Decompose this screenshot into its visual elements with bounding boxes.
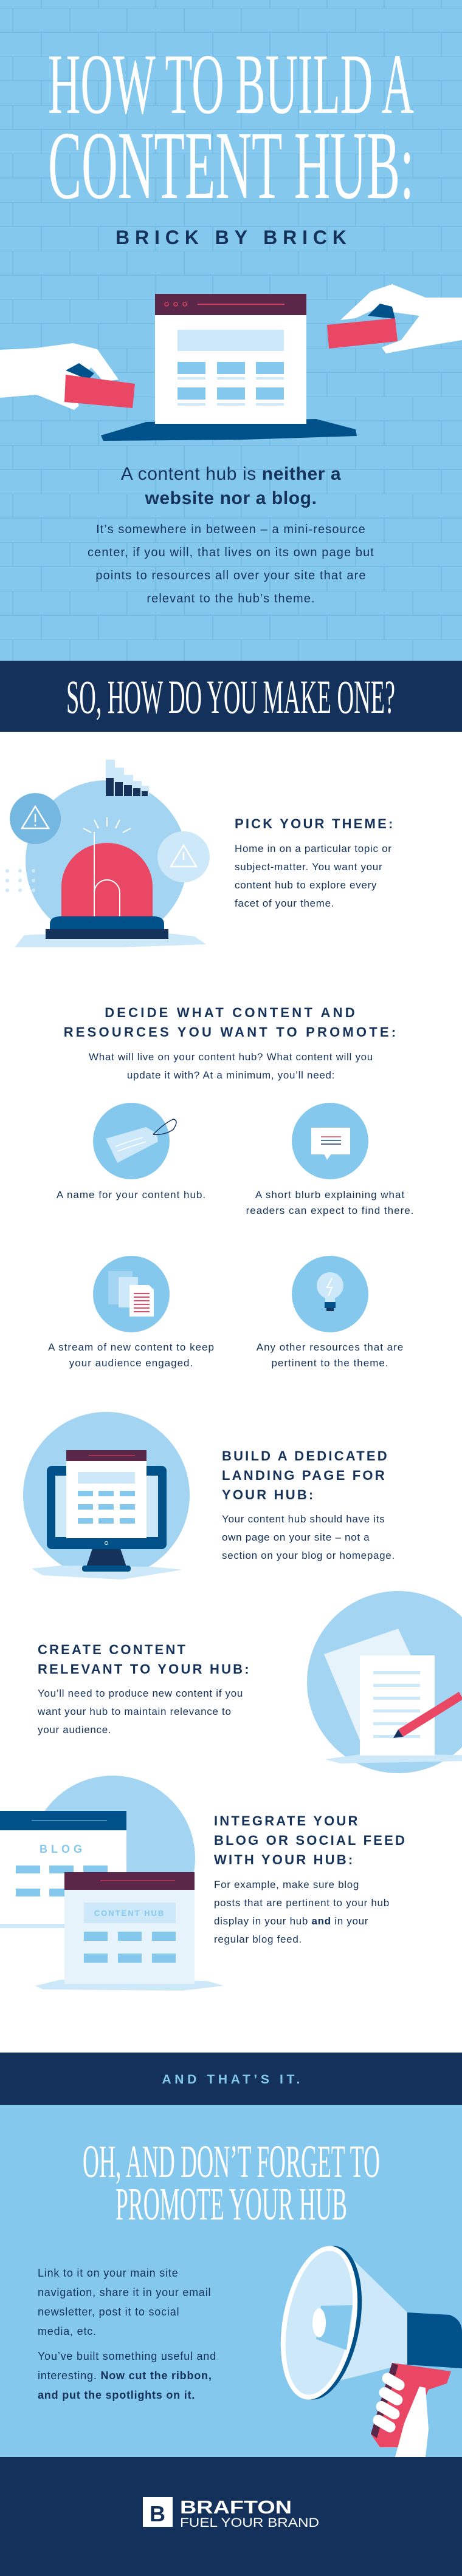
- promo text: interesting. Now cut the ribbon,: [38, 2370, 212, 2382]
- step text: landing page: section on your blog or homepage.: [222, 1550, 395, 1561]
- step text: landing page: Your content hub should have its: [222, 1513, 385, 1525]
- footer: [0, 2457, 462, 2576]
- illustration: blog and content hub windows: CONTENT HUB: [94, 1909, 165, 1918]
- caption: other resources: [257, 1341, 404, 1369]
- caption: stream: A stream of new content to keep: [48, 1341, 215, 1353]
- promo section background: [0, 2105, 462, 2457]
- intro paragraph: center, if you will, that lives on its own page but: [88, 546, 374, 559]
- caption: stream: [48, 1341, 215, 1369]
- title: [48, 36, 414, 219]
- icon: light bulb: [292, 1256, 368, 1332]
- header background: [0, 0, 462, 661]
- promo text: media, etc.: [38, 2325, 97, 2337]
- step text: pick your theme: Home in on a particular topic or: [235, 843, 392, 854]
- promo text: [38, 2267, 216, 2401]
- illustration: blog and content hub windows: [0, 1776, 224, 1991]
- intro heading: [120, 464, 341, 508]
- step heading: landing page: [222, 1448, 389, 1502]
- footer: FUEL YOUR BRAND: [180, 2516, 319, 2530]
- step text: create content: want your hub to maintain relevance to: [38, 1706, 232, 1717]
- band: and that's it: [0, 2053, 462, 2105]
- step text: decide content: update it with? At a minimum, you’ll need:: [127, 1069, 335, 1081]
- illustration: browser with hands: [0, 284, 462, 441]
- caption: name: A name for your content hub.: [57, 1189, 206, 1201]
- footer: BRAFTON: [180, 2496, 292, 2518]
- step heading: decide content: [64, 1005, 398, 1040]
- illustration: monitor: [23, 1412, 190, 1579]
- left hand: [0, 343, 119, 410]
- intro paragraph: [88, 523, 374, 605]
- step heading: landing page: LANDING PAGE FOR: [222, 1468, 387, 1483]
- promo text: newsletter, post it to social: [38, 2306, 179, 2318]
- step text: integrate: posts that are pertinent to your hub: [214, 1897, 390, 1909]
- step text: create content: your audience.: [38, 1724, 111, 1736]
- icon: documents: [93, 1256, 170, 1332]
- promo title: [83, 2136, 380, 2230]
- caption: blurb: A short blurb explaining what: [255, 1189, 405, 1201]
- step heading: decide content: DECIDE WHAT CONTENT AND: [105, 1005, 357, 1020]
- promo text: You’ve built something useful and: [38, 2350, 216, 2362]
- step heading: create content: CREATE CONTENT: [38, 1642, 187, 1657]
- right hand: [340, 284, 462, 353]
- step heading: create content: RELEVANT TO YOUR HUB:: [38, 1661, 251, 1677]
- caption: other resources: Any other resources that are: [257, 1341, 404, 1353]
- step text: pick your theme: facet of your theme.: [235, 898, 334, 909]
- promo text: and put the spotlights on it.: [38, 2389, 195, 2401]
- section band: how do you make one: [0, 661, 462, 732]
- subtitle: BRICK BY BRICK: [116, 227, 346, 248]
- step heading: integrate: WITH YOUR HUB:: [214, 1852, 354, 1867]
- step heading: pick your theme: PICK YOUR THEME:: [235, 816, 395, 831]
- footer: B: [150, 2501, 165, 2526]
- step heading: integrate: [214, 1813, 407, 1867]
- icon: speech bubble: [292, 1103, 368, 1179]
- step text: pick your theme: content hub to explore every: [235, 879, 377, 891]
- caption: blurb: readers can expect to find there.: [246, 1205, 414, 1216]
- step text: create content: [38, 1688, 243, 1736]
- step text: integrate: regular blog feed.: [214, 1934, 302, 1945]
- step text: pick your theme: [235, 843, 392, 909]
- caption: blurb: [246, 1189, 414, 1216]
- illustration: paper and pencil: [307, 1591, 462, 1773]
- icon: name tag: [93, 1103, 176, 1179]
- step text: create content: You’ll need to produce new content if you: [38, 1688, 243, 1699]
- step heading: create content: [38, 1642, 251, 1677]
- promo text: Link to it on your main site: [38, 2267, 179, 2279]
- caption: other resources: pertinent to the theme.: [271, 1357, 389, 1369]
- step heading: integrate: BLOG OR SOCIAL FEED: [214, 1833, 407, 1848]
- step text: decide content: What will live on your content hub? What content will you: [89, 1051, 373, 1063]
- step text: decide content: [89, 1051, 373, 1081]
- step text: integrate: display in your hub and in your: [214, 1915, 368, 1927]
- step heading: decide content: RESOURCES YOU WANT TO PROMOTE:: [64, 1024, 398, 1040]
- intro heading: A content hub is neither a: [121, 464, 341, 484]
- step text: pick your theme: subject-matter. You want your: [235, 861, 382, 873]
- step heading: integrate: INTEGRATE YOUR: [214, 1813, 360, 1828]
- illustration: siren: [5, 760, 210, 947]
- illustration: blog and content hub windows: BLOG: [40, 1843, 86, 1855]
- intro paragraph: points to resources all over your site that are: [95, 569, 367, 582]
- step heading: landing page: BUILD A DEDICATED: [222, 1448, 389, 1463]
- step text: landing page: [222, 1513, 395, 1561]
- step text: integrate: For example, make sure blog: [214, 1879, 359, 1890]
- step text: landing page: own page on your site – not a: [222, 1532, 370, 1543]
- intro paragraph: It’s somewhere in between – a mini-resource: [96, 523, 366, 536]
- intro heading: website nor a blog.: [145, 488, 317, 508]
- step heading: landing page: YOUR HUB:: [222, 1487, 315, 1502]
- intro paragraph: relevant to the hub’s theme.: [147, 592, 315, 605]
- caption: stream: your audience engaged.: [69, 1357, 193, 1369]
- illustration: megaphone: [270, 2240, 462, 2457]
- step text: integrate: [214, 1879, 390, 1945]
- promo text: navigation, share it in your email: [38, 2286, 211, 2298]
- band: and that's it: AND THAT’S IT.: [162, 2073, 300, 2087]
